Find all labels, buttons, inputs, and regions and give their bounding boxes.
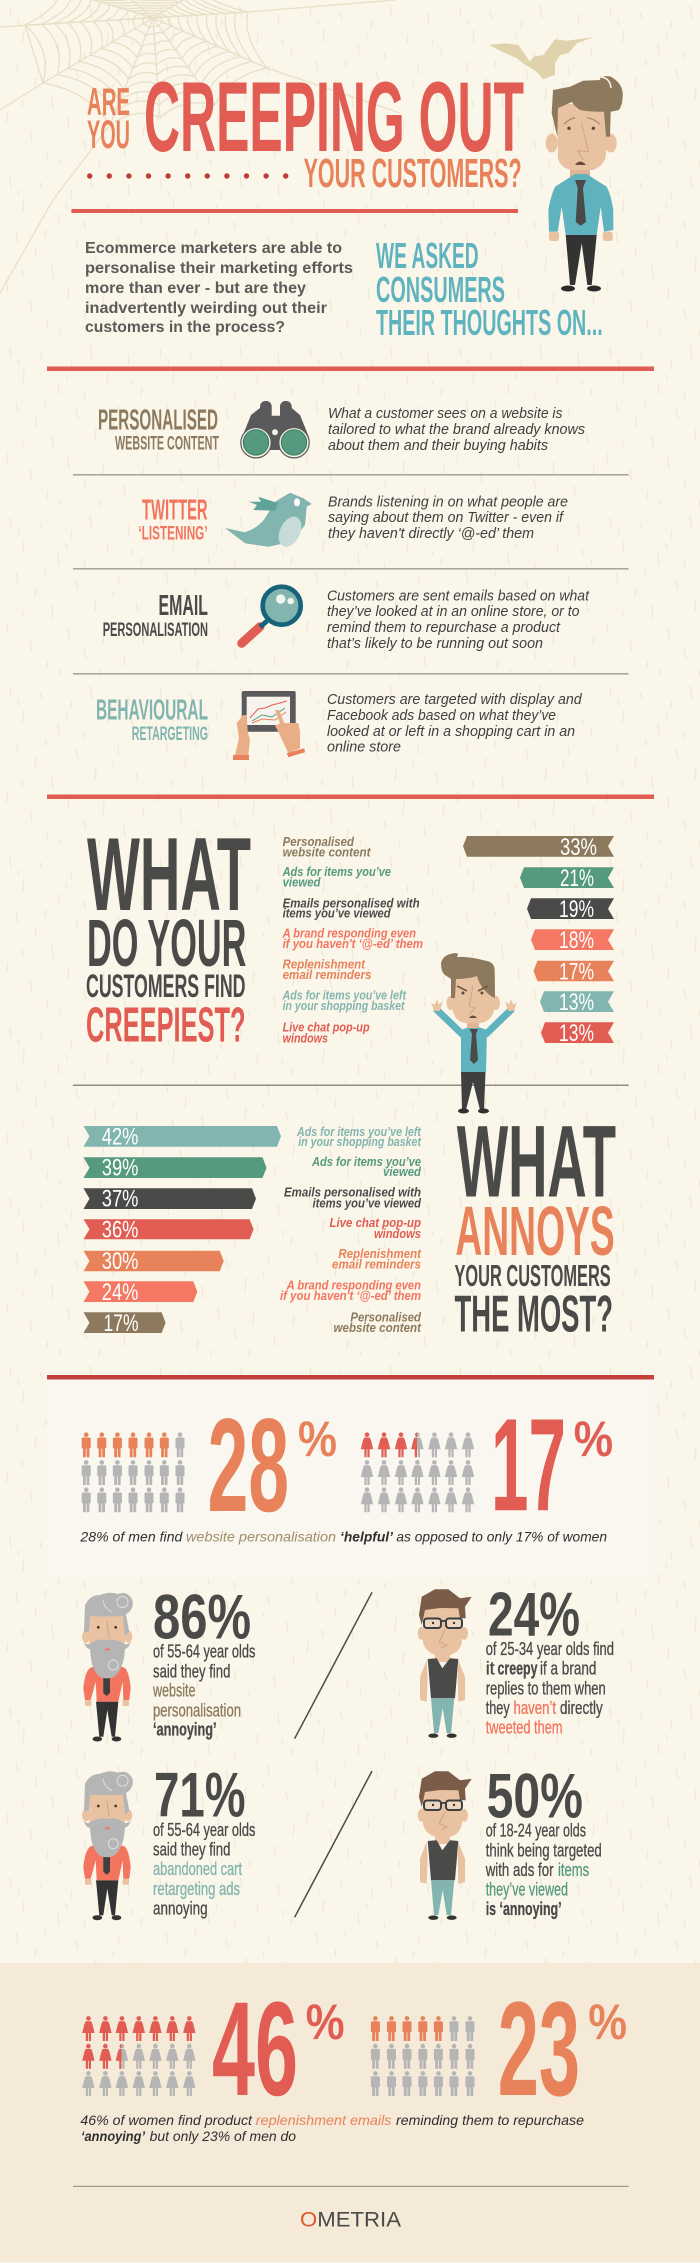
stat: 23%: % [588, 1994, 627, 2050]
caption: but only 23% of men do [150, 2128, 296, 2144]
description: that’s likely to be running out soon [327, 636, 543, 652]
bar: 39%: 39% [102, 1155, 138, 1182]
chart labels: creepiest: Emails personalised with [283, 896, 420, 910]
bar: 36% [84, 1217, 254, 1244]
stat: 28%: % [298, 1411, 337, 1467]
row: twitter listening [138, 493, 568, 550]
bar: 42% [84, 1123, 281, 1150]
text [153, 1820, 255, 1918]
chart labels: annoying: website content [334, 1321, 422, 1335]
heading: TWITTER [142, 494, 208, 526]
text: personalisation [153, 1701, 241, 1721]
bar: 19% [527, 896, 614, 923]
text: of 55-64 year olds [153, 1820, 255, 1840]
bar: 13% basket [540, 989, 614, 1016]
text: website [152, 1681, 196, 1701]
text: with ads for [485, 1860, 554, 1880]
caption: ‘helpful’ [340, 1529, 394, 1545]
description [327, 692, 583, 756]
panel: replenishment stats [0, 1963, 700, 2262]
chart labels: annoying: Ads for items you’ve [311, 1155, 421, 1169]
stat: 46%: % [306, 1994, 345, 2050]
bat [489, 37, 593, 79]
heading: what annoys your customers the most [454, 1105, 616, 1344]
chart labels: creepiest: email reminders [283, 968, 371, 982]
bar: 39% [84, 1155, 266, 1182]
heading: WEBSITE CONTENT [115, 432, 219, 454]
logo: ometria: OMETRIA [300, 2209, 401, 2232]
description: tailored to what the brand already knows [328, 422, 585, 438]
slash divider top [295, 1592, 372, 1739]
pictogram: men 28% [82, 1432, 184, 1512]
text: retargeting ads [153, 1879, 240, 1899]
chart labels: creepiest: website content [283, 846, 371, 860]
stat block: 86% website personalisation [82, 1582, 255, 1742]
bar: 36%: 36% [102, 1217, 138, 1244]
chart labels: creepiest: A brand responding even [282, 926, 416, 940]
chart labels: creepiest: viewed [283, 876, 321, 890]
title [87, 61, 524, 196]
chart labels: creepiest [282, 835, 423, 1046]
heading: we asked consumers: WE ASKED [376, 235, 479, 276]
stat: 28%: 28 [208, 1392, 289, 1540]
description: Customers are sent emails based on what [327, 589, 590, 605]
text [486, 1639, 614, 1737]
chart labels: creepiest: Live chat pop-up [283, 1021, 370, 1035]
caption: 46% of women find product [80, 2112, 253, 2128]
description [328, 495, 568, 542]
divider: definitions [47, 794, 654, 799]
bar: 19%: 19% [559, 896, 594, 923]
text: they [486, 1698, 510, 1718]
title: YOU [87, 113, 130, 157]
description: looked at or left in a shopping cart in an [327, 724, 575, 740]
intro paragraph: Ecommerce marketers are able to [85, 240, 342, 257]
chart labels: annoying: items you’ve viewed [312, 1196, 421, 1210]
caption: reminding them to repurchase [396, 2112, 584, 2128]
character: young man [418, 1771, 472, 1920]
text: it [486, 1659, 495, 1679]
title: are you: ARE [87, 81, 130, 124]
spider web [0, 0, 400, 293]
bar: 37%: 37% [102, 1186, 138, 1213]
chart labels: creepiest: items you’ve viewed [283, 907, 391, 921]
text: haven’t [514, 1698, 556, 1718]
heading [98, 404, 219, 454]
caption [80, 2112, 584, 2144]
slash divider bottom [295, 1771, 372, 1917]
stat: 17%: % [574, 1411, 613, 1467]
bar: 17%: 17% [104, 1310, 138, 1337]
chart labels: annoying: Replenishment [338, 1247, 422, 1261]
bar: 37% [84, 1186, 256, 1213]
text: of 18-24 year olds [486, 1821, 586, 1841]
text: think being targeted [486, 1841, 602, 1861]
heading [103, 590, 208, 641]
chart labels: annoying: if you haven't ‘@-ed’ them [280, 1289, 421, 1303]
text: directly [560, 1698, 603, 1718]
pictogram: women 46% [82, 2016, 196, 2096]
description: online store [327, 740, 401, 756]
chart: annoying ribbons [84, 1123, 281, 1337]
text: if a brand [540, 1659, 596, 1679]
bar: 21% [520, 865, 614, 892]
text [485, 1821, 602, 1919]
chart labels: creepiest: in your shopping basket [283, 999, 405, 1013]
character: young man [418, 1589, 472, 1738]
text: of 25-34 year olds find [486, 1639, 614, 1659]
bar: 17% [534, 958, 614, 986]
divider: intro [47, 366, 654, 371]
chart labels: annoying [280, 1125, 422, 1335]
chart labels: annoying: Personalised [350, 1311, 421, 1325]
heading: ‘LISTENING’ [138, 522, 208, 544]
caption [79, 1529, 607, 1545]
intro paragraph: customers in the process? [85, 319, 285, 336]
stat block: 71% abandoned cart [82, 1761, 255, 1920]
bar: 13% chat: 13% [559, 1020, 594, 1047]
row: email personalisation [103, 587, 590, 652]
bar: 33% [463, 834, 614, 861]
heading: what do your customers find creepiest: CUSTOMERS FIND [86, 968, 246, 1004]
intro paragraph [85, 240, 353, 336]
heading: PERSONALISATION [103, 619, 208, 641]
chart labels: creepiest: Ads for items you’ve [282, 865, 391, 879]
caption: 28% of men find [79, 1529, 184, 1545]
bar: 18%: 18% [559, 927, 594, 954]
heading: we asked consumers: CONSUMERS [376, 269, 505, 310]
text: said they find [153, 1840, 230, 1860]
title: dotted leader [87, 173, 288, 179]
heading: EMAIL [158, 590, 208, 622]
icon: tablet with hands [233, 691, 305, 760]
heading: what do your customers find creepiest: WHAT [87, 817, 251, 933]
stat: 46%: 46 [212, 1975, 298, 2124]
stat: 23%: 23 [498, 1975, 580, 2124]
bar: 30% [84, 1248, 224, 1275]
character: worried man [546, 76, 623, 291]
description: Facebook ads based on what they’ve [327, 708, 556, 724]
chart labels: annoying: Emails personalised with [284, 1186, 421, 1200]
bar: 24% [84, 1279, 197, 1306]
number: 86% [153, 1582, 251, 1652]
heading: what do your customers find creepiest: DO YOUR [87, 906, 246, 981]
text: ‘annoying’ [153, 1720, 216, 1740]
bar: 17%: 17% [559, 958, 594, 986]
icon: binoculars [241, 401, 309, 458]
bar: 13% chat [541, 1020, 614, 1047]
heading: PERSONALISED [98, 404, 218, 436]
bar: 30%: 30% [102, 1248, 138, 1275]
text: of 55-64 year olds [153, 1641, 255, 1661]
character: old man [82, 1771, 133, 1920]
bar: 13% basket: 13% [559, 989, 594, 1016]
bar: 42%: 42% [102, 1123, 138, 1150]
text: replies to them when [486, 1678, 606, 1698]
divider: title [71, 209, 518, 213]
chart labels: annoying: email reminders [332, 1258, 421, 1272]
bar: 24%: 24% [102, 1279, 138, 1306]
text: items [558, 1860, 589, 1880]
panel: helpful stats [47, 1375, 654, 1578]
caption: ‘annoying’ [81, 2128, 146, 2144]
description: they haven't directly ‘@-ed’ them [328, 526, 534, 542]
text [152, 1641, 255, 1740]
number: 24% [488, 1581, 580, 1650]
stat block: 24% brand replies [418, 1581, 614, 1738]
description: they’ve looked at in an online store, or to [327, 604, 580, 620]
description: Brands listening in on what people are [328, 495, 568, 511]
bar: 18% [531, 927, 614, 954]
description [328, 406, 585, 454]
row: behavioural retargeting [96, 691, 583, 760]
chart labels: creepiest: Ads for items you’ve left [282, 988, 407, 1002]
stat: 17%: 17 [491, 1391, 566, 1538]
heading: RETARGETING [132, 723, 208, 745]
text: said they find [153, 1661, 230, 1681]
description: saying about them on Twitter - even if [328, 510, 565, 526]
text: tweeted them [486, 1717, 562, 1737]
stat block: 50% viewed items [418, 1761, 602, 1920]
bar: 33%: 33% [560, 834, 597, 861]
chart labels: annoying: Live chat pop-up [330, 1216, 421, 1230]
bar: 21%: 21% [560, 865, 594, 892]
panel: definitions [73, 401, 629, 760]
chart: creepiest ribbons [463, 834, 614, 1047]
heading: BEHAVIOURAL [96, 694, 208, 726]
heading [96, 694, 208, 745]
text: abandoned cart [153, 1859, 242, 1879]
bar: 17% [84, 1310, 166, 1337]
description: about them and their buying habits [328, 438, 548, 454]
caption: website personalisation [186, 1529, 336, 1545]
heading: we asked consumers [376, 235, 603, 343]
pictogram: men 23% [371, 2016, 474, 2096]
number: 50% [487, 1761, 583, 1831]
title: are you [87, 81, 130, 157]
description [327, 589, 590, 652]
description: Customers are targeted with display and [327, 692, 583, 708]
text: annoying [153, 1898, 208, 1918]
heading: what do your customers find creepiest: CREEPIEST? [86, 999, 246, 1053]
chart labels: annoying: windows [374, 1227, 421, 1241]
chart labels: annoying: in your shopping basket [298, 1135, 422, 1149]
chart labels: annoying: A brand responding even [286, 1278, 421, 1292]
pictogram: women 17% [361, 1432, 474, 1512]
text: they’ve viewed [486, 1880, 568, 1900]
caption: replenishment emails [256, 2112, 392, 2128]
number: 71% [154, 1761, 246, 1831]
character: old man [82, 1593, 133, 1742]
icon: magnifier [242, 587, 301, 643]
chart labels: creepiest: if you haven't ‘@-ed’ them [283, 937, 423, 951]
chart labels: creepiest: Personalised [283, 835, 354, 849]
description: remind them to repurchase a product [327, 620, 561, 636]
chart labels: creepiest: windows [283, 1032, 328, 1046]
text: creepy [498, 1659, 538, 1679]
text: is ‘annoying’ [486, 1899, 562, 1919]
intro paragraph: personalise their marketing efforts [85, 260, 353, 277]
intro paragraph: more than ever - but are they [85, 280, 306, 297]
chart labels: creepiest: Replenishment [283, 957, 366, 971]
heading: what do your customers find creepiest [86, 817, 251, 1053]
chart labels: annoying: viewed [383, 1165, 421, 1179]
intro paragraph: inadvertently weirding out their [85, 300, 327, 317]
caption: as opposed to only 17% of women [396, 1529, 607, 1545]
icon: bird [225, 493, 312, 550]
heading [138, 494, 208, 544]
description: What a customer sees on a website is [328, 406, 562, 422]
row: personalised website content [98, 401, 585, 458]
character: angry man [433, 953, 515, 1114]
chart labels: annoying: Ads for items you’ve left [296, 1125, 422, 1139]
